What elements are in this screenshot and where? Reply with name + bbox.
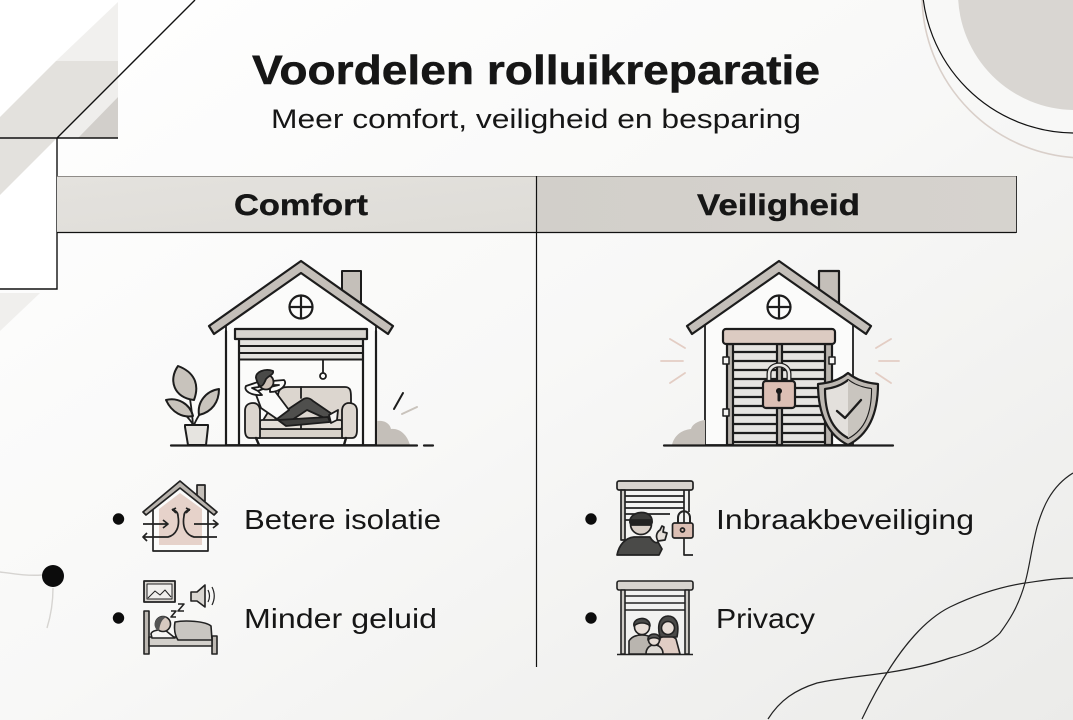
- decoration: top-right circles: [922, 0, 1073, 158]
- list item: minder geluid: [113, 581, 437, 654]
- ground line: [171, 444, 433, 447]
- header band: veiligheid: Veiligheid: [697, 189, 860, 222]
- header band: comfort: Comfort: [234, 189, 368, 222]
- label: Minder geluid: [244, 603, 437, 634]
- header band: veiligheid: [536, 176, 1016, 233]
- list item: inbraakbeveiliging: [585, 481, 974, 555]
- icon: burglar at shutter with padlock: [617, 481, 693, 555]
- ground line: [664, 444, 893, 447]
- plant: [166, 366, 219, 445]
- decoration: black dot with lines: [0, 565, 64, 628]
- panel: comfort: [57, 176, 536, 654]
- header band: comfort: [57, 176, 536, 233]
- illustration: house with locked shutter and shield: [661, 261, 899, 446]
- sofa: [245, 387, 357, 445]
- panel: veiligheid: [536, 176, 1016, 667]
- decoration: top-left geometric shapes: [0, 0, 195, 331]
- list item: privacy: [585, 581, 815, 654]
- label: Inbraakbeveiliging: [716, 504, 974, 535]
- bush: [377, 421, 410, 445]
- subtitle: Meer comfort, veiligheid en besparing: [271, 104, 801, 134]
- column divider: [536, 176, 538, 667]
- padlock: [763, 365, 795, 408]
- illustration: house with person relaxing on sofa: [166, 261, 433, 446]
- bush: [672, 420, 705, 445]
- icon: family behind shutter: [617, 581, 693, 654]
- icon: house with airflow arrows: [143, 481, 218, 551]
- list item: betere isolatie: [113, 481, 441, 551]
- motion marks: [394, 393, 417, 414]
- person relaxing: [245, 370, 338, 426]
- icon: sleeping person with noise: [144, 581, 217, 654]
- title: Voordelen rolluikreparatie: [252, 47, 820, 93]
- label: Betere isolatie: [244, 504, 441, 535]
- label: Privacy: [716, 603, 815, 634]
- safety rays: [661, 339, 899, 383]
- shield: [818, 373, 878, 445]
- decoration: bottom-right wavy lines: [768, 473, 1073, 719]
